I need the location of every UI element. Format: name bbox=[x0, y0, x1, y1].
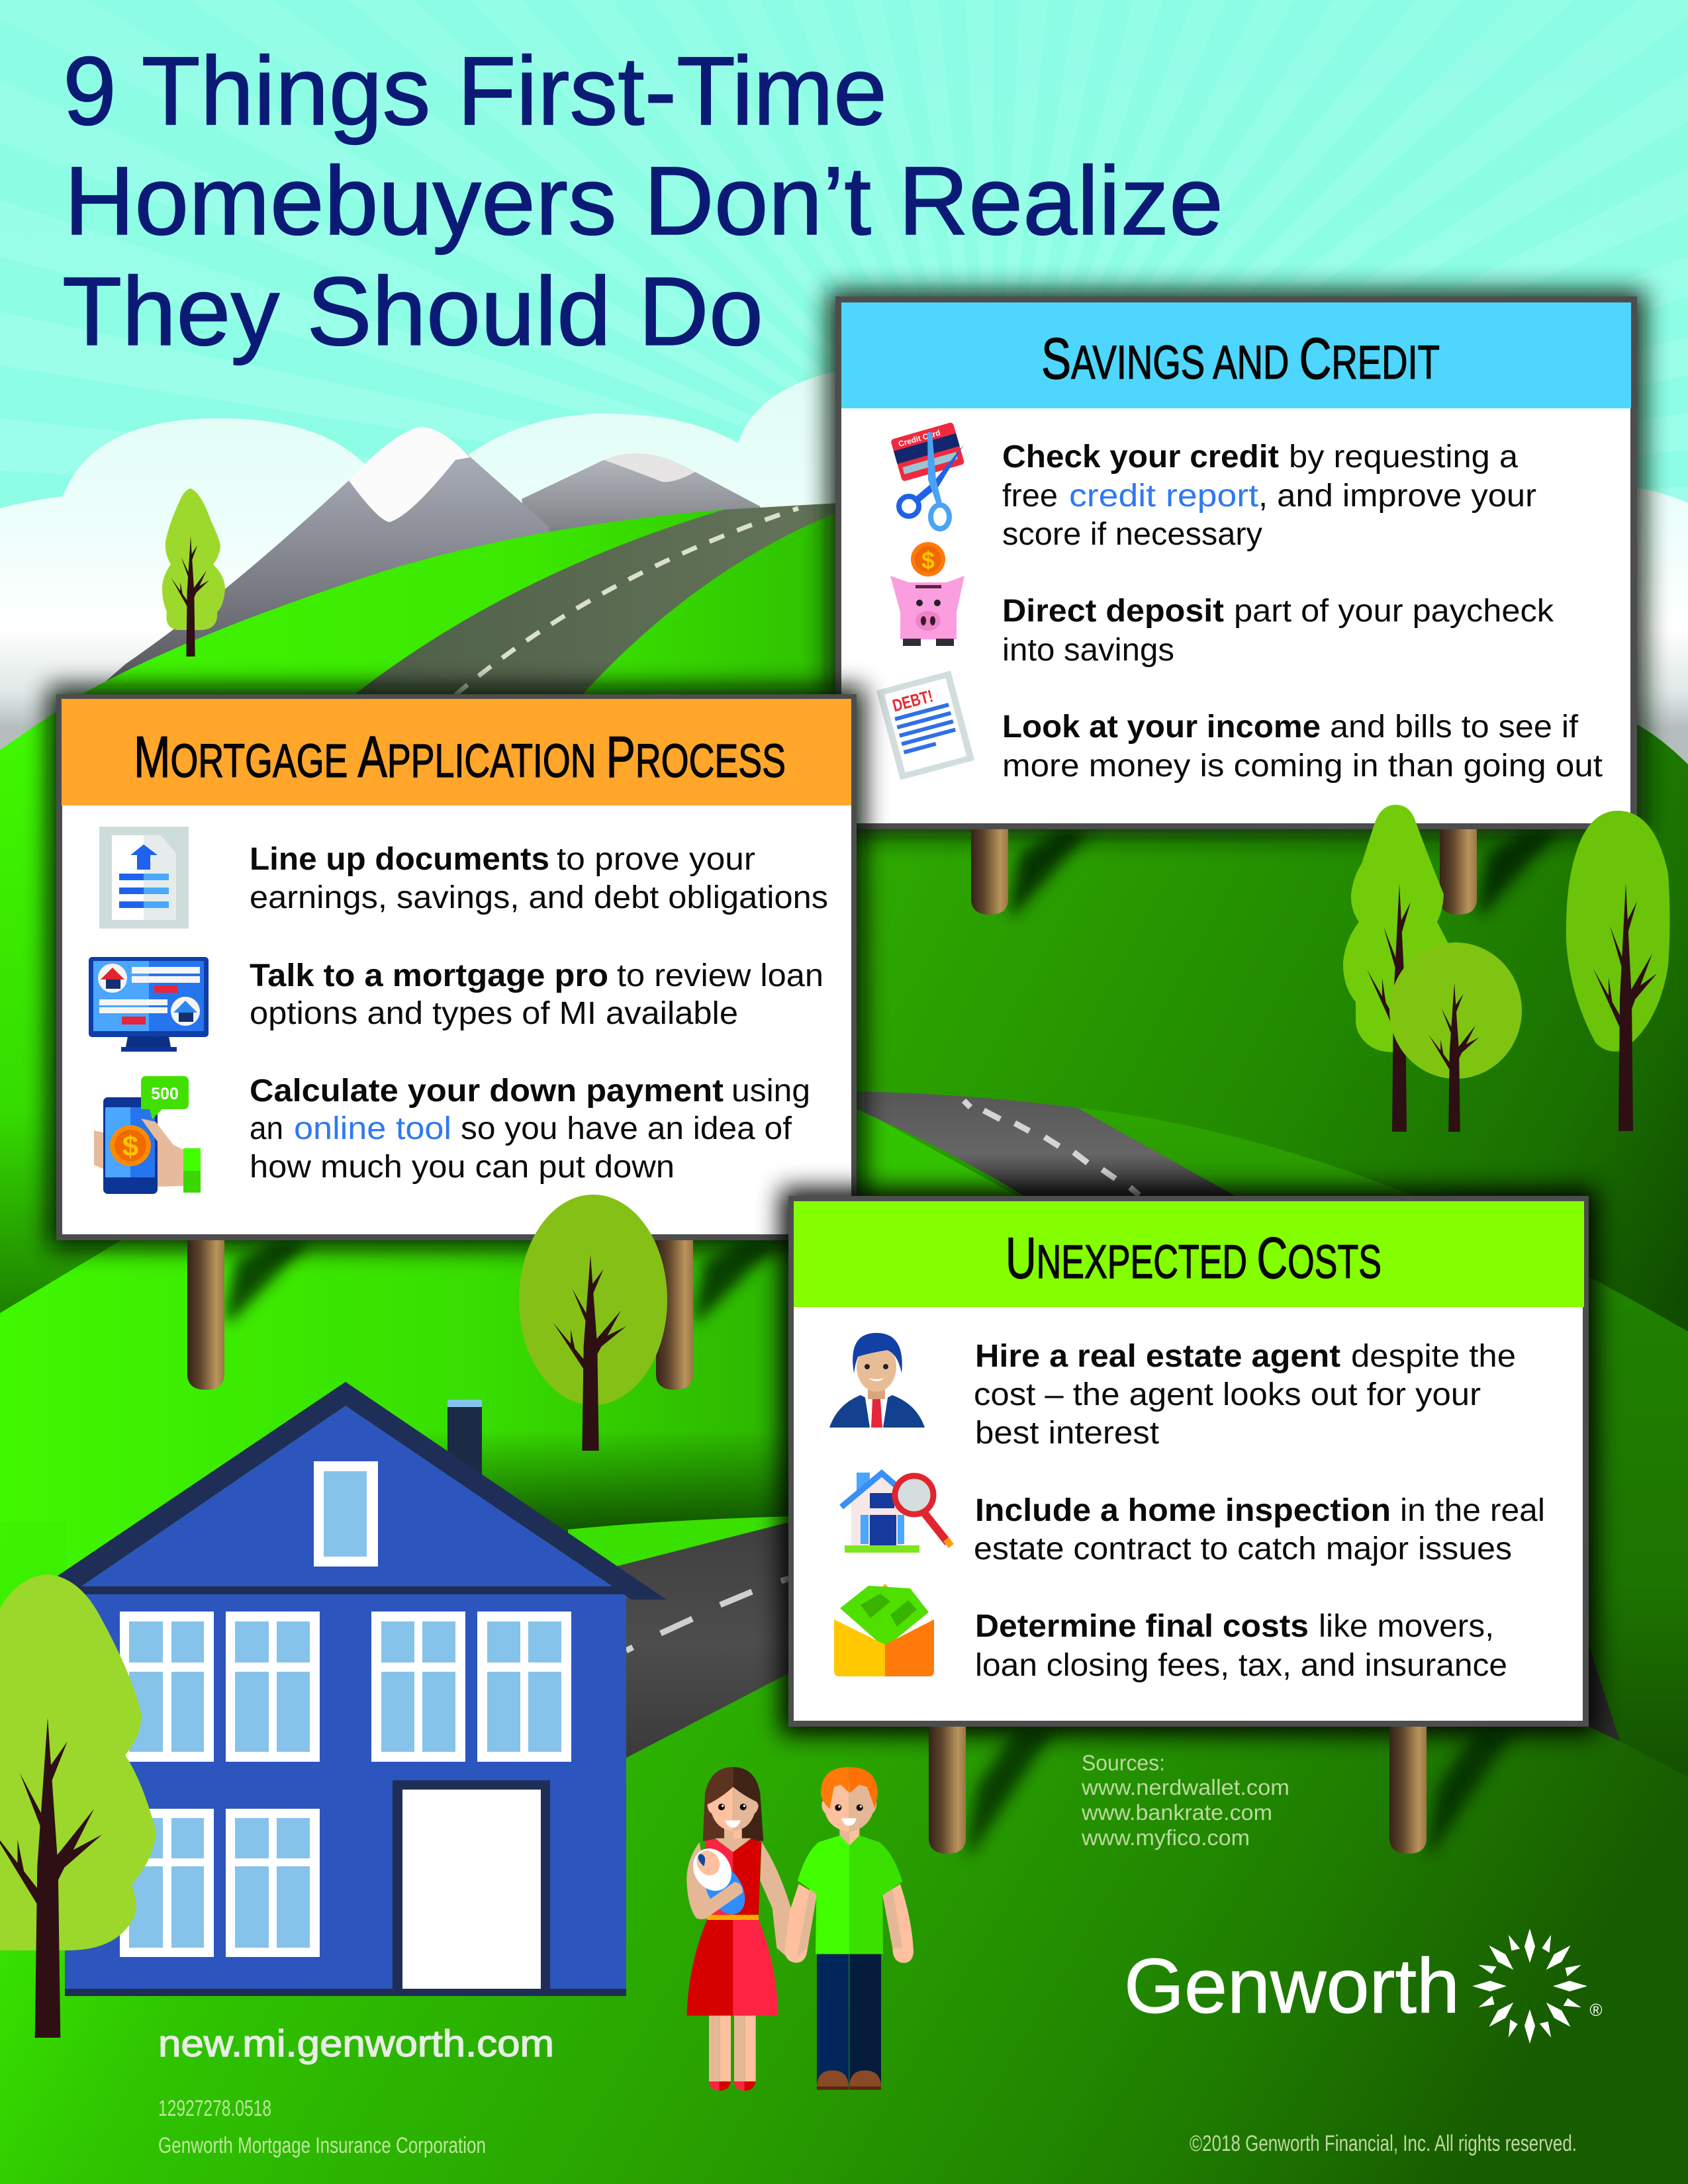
text: look at your income: Look at your income bbox=[1002, 709, 1321, 745]
icon: starburst bbox=[1472, 1929, 1587, 2044]
text: calculate your down payment: how much you can put down bbox=[250, 1150, 675, 1185]
baby bbox=[686, 1841, 753, 1921]
mid hills: right side bbox=[0, 702, 1688, 1787]
text: determine final costs: Determine final costs bbox=[975, 1609, 1309, 1644]
icon: home inspection bbox=[841, 1473, 951, 1553]
genworth logo: ® bbox=[1589, 2000, 1603, 2020]
text: look at your income bbox=[1002, 709, 1603, 784]
text: line up documents: to prove your bbox=[557, 842, 755, 877]
text: hire a real estate agent: best interest bbox=[975, 1416, 1159, 1451]
text: look at your income: and bills to see if bbox=[1330, 709, 1579, 745]
icon: debt sheet bbox=[876, 670, 974, 780]
text: line up documents bbox=[250, 842, 828, 915]
title: They Should Do bbox=[62, 257, 763, 366]
company name: Genworth Mortgage Insurance Corporation bbox=[158, 2133, 486, 2158]
hill and road behind panels bbox=[63, 503, 841, 735]
icon: real estate agent bbox=[829, 1333, 925, 1428]
post bbox=[1440, 827, 1477, 915]
text: direct deposit: part of your paycheck bbox=[1234, 594, 1554, 629]
title bbox=[62, 37, 1223, 366]
lower windows bbox=[120, 1809, 320, 1957]
text: calculate your down payment: an bbox=[250, 1111, 283, 1146]
chimney bbox=[447, 1400, 482, 1479]
text: include a home inspection: in the real bbox=[1400, 1493, 1545, 1528]
icon: envelope of money bbox=[834, 1584, 934, 1676]
icon: piggy bank: $ bbox=[921, 547, 935, 574]
text: determine final costs bbox=[975, 1609, 1507, 1683]
text: include a home inspection: estate contract to catch major issues bbox=[974, 1531, 1512, 1567]
sources: www.nerdwallet.com bbox=[1081, 1775, 1289, 1799]
heading: UNEXPECTED COSTS bbox=[1006, 1225, 1382, 1291]
woman bbox=[686, 1767, 794, 2091]
panel: mortgage application process bbox=[48, 686, 865, 1390]
sources: www.bankrate.com bbox=[1081, 1800, 1272, 1825]
panel: savings and credit bbox=[827, 290, 1645, 917]
house bbox=[58, 1382, 667, 1996]
sources bbox=[1081, 1751, 1289, 1850]
clouds bbox=[0, 371, 1688, 794]
icon: piggy bank bbox=[890, 542, 964, 646]
text: calculate your down payment bbox=[250, 1073, 810, 1185]
post bbox=[971, 827, 1008, 915]
title: Homebuyers Don’t Realize bbox=[64, 147, 1223, 255]
heading: SAVINGS AND CREDIT bbox=[1041, 326, 1440, 391]
text: determine final costs: like movers, bbox=[1319, 1609, 1494, 1644]
text: hire a real estate agent: despite the bbox=[1351, 1339, 1516, 1374]
text: hire a real estate agent: cost – the agent looks out for your bbox=[974, 1377, 1481, 1412]
text: calculate your down payment: Calculate your down payment bbox=[250, 1073, 724, 1109]
text: hire a real estate agent: Hire a real estate agent bbox=[975, 1339, 1340, 1374]
copyright: ©2018 Genworth Financial, Inc. All rights reserved. bbox=[1190, 2131, 1577, 2156]
text: include a home inspection: Include a home inspection bbox=[975, 1493, 1391, 1528]
text: check your credit: free bbox=[1002, 478, 1058, 514]
icon: phone with hand bbox=[94, 1076, 201, 1194]
door bbox=[393, 1780, 550, 1992]
icon: document bbox=[99, 827, 189, 929]
sky with sun rays bbox=[0, 0, 1688, 860]
text: talk to a mortgage pro: Talk to a mortgage pro bbox=[250, 958, 608, 993]
post bbox=[1389, 1724, 1427, 1854]
icon: debt sheet: DEBT! bbox=[890, 686, 935, 715]
text: calculate your down payment: online tool bbox=[294, 1111, 451, 1146]
icon: credit card and scissors: Credit Card bbox=[897, 428, 941, 449]
lower-left hill bbox=[0, 1191, 794, 1621]
attic window bbox=[314, 1461, 378, 1567]
text: line up documents: earnings, savings, and debt obligations bbox=[250, 880, 828, 915]
website url: new.mi.genworth.com bbox=[158, 2023, 554, 2065]
winding road bbox=[851, 1091, 1241, 1199]
bottom hill and road bbox=[0, 1521, 1688, 2184]
text: calculate your down payment: so you have an idea of bbox=[461, 1111, 792, 1146]
text: determine final costs: loan closing fees, tax, and insurance bbox=[975, 1648, 1507, 1683]
document number: 12927278.0518 bbox=[158, 2096, 271, 2121]
upper windows bbox=[120, 1612, 571, 1762]
text: direct deposit: into savings bbox=[1002, 633, 1174, 668]
sources: Sources: bbox=[1082, 1751, 1165, 1775]
text: talk to a mortgage pro: to review loan bbox=[617, 958, 823, 993]
gable bbox=[81, 1406, 612, 1586]
text: hire a real estate agent bbox=[974, 1339, 1516, 1451]
icon: phone with hand: 500 bbox=[151, 1085, 179, 1103]
text: check your credit: credit report bbox=[1069, 478, 1258, 514]
text: check your credit: , and improve your bbox=[1258, 478, 1536, 514]
family illustration bbox=[686, 1767, 914, 2091]
roof bbox=[58, 1382, 667, 1600]
road to house bbox=[616, 1521, 794, 1762]
icon: phone with hand: $ bbox=[122, 1130, 138, 1163]
far road bbox=[346, 503, 841, 702]
text: talk to a mortgage pro: options and types of MI available bbox=[250, 996, 738, 1031]
house body bbox=[65, 1586, 626, 1996]
text: check your credit: score if necessary bbox=[1002, 517, 1262, 552]
icon: credit card and scissors bbox=[890, 422, 964, 529]
tree: tall bbox=[1343, 805, 1448, 1132]
text: check your credit bbox=[1002, 439, 1536, 552]
panel: unexpected costs bbox=[780, 1188, 1597, 1856]
small tree on hilltop bbox=[162, 488, 225, 657]
trees right of savings panel bbox=[1343, 805, 1669, 1132]
big tree left of house bbox=[0, 1574, 156, 2038]
text: direct deposit: Direct deposit bbox=[1002, 594, 1224, 629]
text: check your credit: Check your credit bbox=[1002, 439, 1279, 475]
text: line up documents: Line up documents bbox=[250, 842, 549, 877]
post bbox=[929, 1724, 966, 1854]
tree: round bbox=[1389, 942, 1522, 1132]
sources: www.myfico.com bbox=[1081, 1825, 1250, 1850]
far dark road edge bbox=[1585, 1635, 1620, 1741]
post bbox=[187, 1238, 224, 1390]
icon: monitor bbox=[89, 957, 209, 1052]
man bbox=[784, 1767, 914, 2090]
post bbox=[656, 1238, 693, 1390]
tree: oval bbox=[1566, 811, 1669, 1131]
text: check your credit: by requesting a bbox=[1289, 439, 1518, 475]
genworth logo: Genworth bbox=[1124, 1942, 1460, 2029]
heading: MORTGAGE APPLICATION PROCESS bbox=[134, 724, 786, 790]
text: talk to a mortgage pro bbox=[250, 958, 823, 1031]
text: include a home inspection bbox=[974, 1493, 1545, 1567]
tree in front of mortgage panel bbox=[519, 1195, 667, 1451]
text: direct deposit bbox=[1002, 594, 1554, 668]
text: look at your income: more money is coming in than going out bbox=[1002, 749, 1603, 784]
genworth logo bbox=[1124, 1929, 1603, 2044]
text: calculate your down payment: using bbox=[731, 1073, 810, 1109]
title: 9 Things First-Time bbox=[63, 37, 887, 146]
mountains bbox=[56, 427, 768, 725]
